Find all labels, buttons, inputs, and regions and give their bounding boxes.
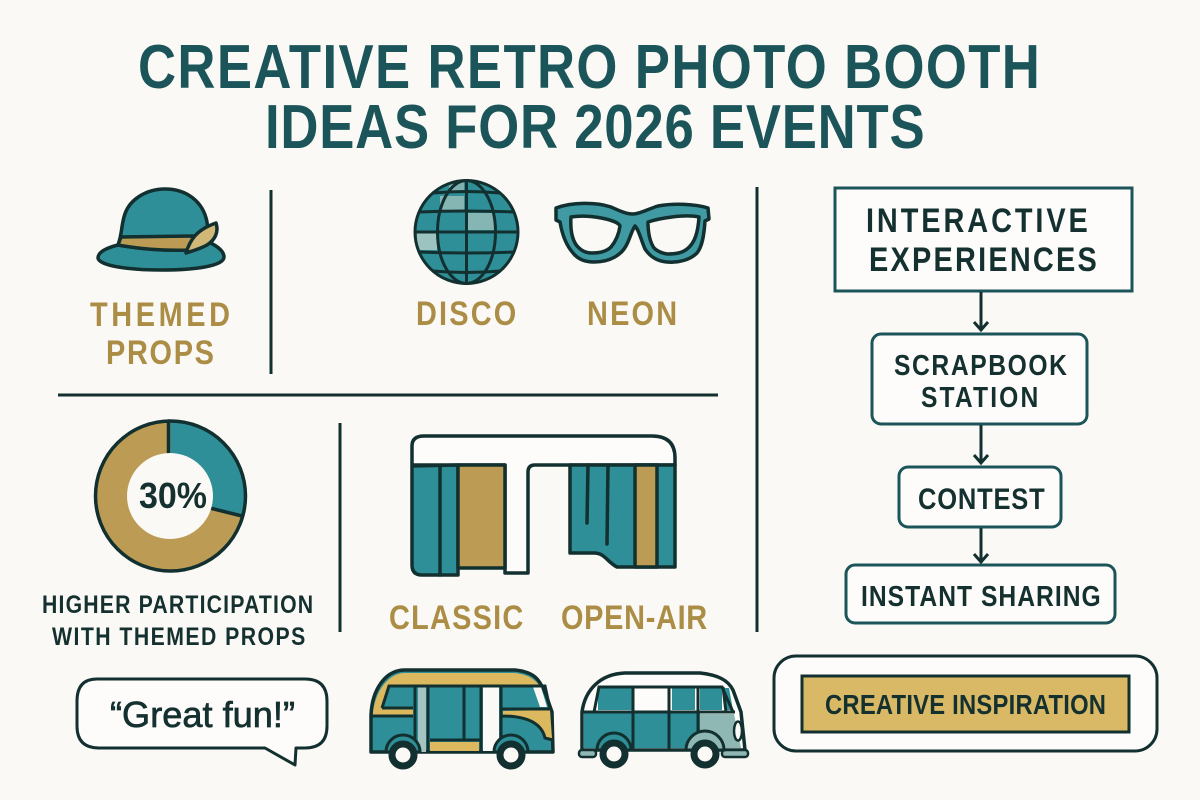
arrow <box>974 292 988 330</box>
box: instant sharing <box>846 565 1115 623</box>
value: 30% <box>139 475 207 516</box>
caption: WITH THEMED PROPS <box>52 622 305 650</box>
arrow <box>974 425 988 463</box>
panel: disco and neon <box>415 180 709 333</box>
icon: booths <box>412 436 675 575</box>
banner text: CREATIVE INSPIRATION <box>825 688 1106 720</box>
label: themed props <box>90 295 230 372</box>
icon: vintage van <box>579 673 748 765</box>
arrow <box>974 528 988 562</box>
box: interactive experiences: INTERACTIVE <box>866 201 1088 240</box>
caption <box>42 590 313 650</box>
box: scrapbook station: STATION <box>921 381 1038 413</box>
panel: interactive experiences flow <box>835 188 1132 623</box>
callout: speech bubble <box>77 679 327 765</box>
label: themed props: THEMED <box>90 295 230 334</box>
panel: booth styles <box>389 436 707 637</box>
panel: creative inspiration <box>774 656 1157 751</box>
label: classic: CLASSIC <box>389 598 523 637</box>
icon: hat <box>98 189 224 270</box>
icon: vintage bus <box>371 670 553 766</box>
box: contest: CONTEST <box>918 482 1045 515</box>
caption: HIGHER PARTICIPATION <box>42 590 313 618</box>
box: scrapbook station <box>872 334 1087 424</box>
box: scrapbook station: SCRAPBOOK <box>894 349 1067 381</box>
label: disco: DISCO <box>416 294 516 333</box>
title <box>138 33 1040 162</box>
label: neon: NEON <box>587 294 677 333</box>
box: instant sharing: INSTANT SHARING <box>861 580 1101 612</box>
box: interactive experiences: EXPERIENCES <box>869 240 1097 279</box>
icon: disco ball <box>415 180 518 284</box>
box: interactive experiences <box>835 188 1132 291</box>
panel: themed props <box>90 189 230 372</box>
label: open-air: OPEN-AIR <box>561 598 707 637</box>
panel: participation statistic <box>42 421 313 650</box>
banner <box>802 676 1129 732</box>
callout: speech bubble: “Great fun!” <box>110 694 295 735</box>
title: IDEAS FOR 2026 EVENTS <box>265 93 925 162</box>
box: contest <box>899 467 1061 527</box>
label: themed props: PROPS <box>106 333 214 372</box>
icon: glasses <box>556 203 709 262</box>
donut chart <box>96 421 246 571</box>
title: CREATIVE RETRO PHOTO BOOTH <box>138 33 1040 102</box>
